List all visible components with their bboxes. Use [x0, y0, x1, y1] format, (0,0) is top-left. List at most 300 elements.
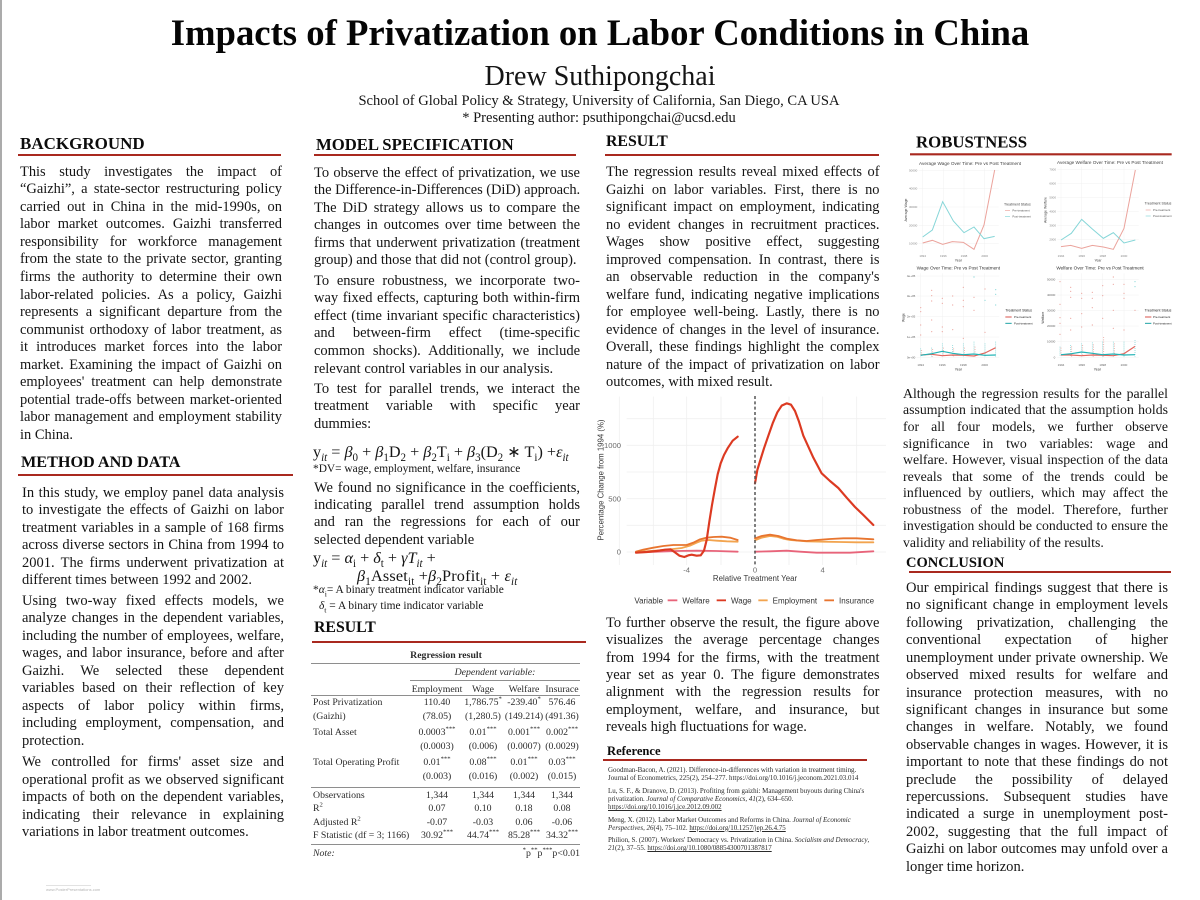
table row: adjusted r squared — [313, 815, 572, 828]
table row: post privatization: 110.40 — [424, 696, 450, 708]
table row: r squared: 0.07 — [428, 802, 446, 814]
formula: regression model — [313, 549, 518, 588]
reference: Meng: Perspectives, 26(4), 75–102. https://doi.org/10.1257/jep.26.4.75 — [608, 824, 786, 832]
y axis labels: 1000 — [604, 441, 621, 450]
text: model paragraph 4 — [314, 480, 580, 548]
text: robustness discussion: for all four models, we further observe — [903, 419, 1168, 434]
x axis labels — [683, 566, 826, 575]
table row: asset errors: (0.006) — [469, 740, 497, 752]
table row: asset errors — [420, 740, 579, 752]
chart legend: Variable — [634, 596, 664, 605]
table row: operating profit: 0.01*** — [510, 755, 538, 768]
plot: wage scatter over time: 2000 — [981, 363, 988, 367]
text: method paragraph 2: wages, and labor insurance, before and after — [22, 645, 284, 661]
table row: gaizhi errors: (Gaizhi) — [313, 710, 346, 722]
plot: average wage over time: 1996 — [940, 254, 947, 258]
text: method paragraph 1: 2001. The firms underwent privatization at — [22, 554, 284, 570]
text: robustness discussion: validity and reliability of the results. — [903, 535, 1104, 550]
table row: adjusted r squared: -0.03 — [473, 816, 493, 828]
text: model paragraph 1: firms that underwent privatization (treatment — [314, 235, 580, 251]
text: conclusion — [906, 580, 1168, 876]
heading: result: RESULT — [314, 618, 376, 636]
text: result summary: nature of the impact of privatization on labor — [606, 357, 880, 373]
text: model paragraph 1 — [314, 164, 580, 268]
text: method paragraph 1 — [22, 484, 284, 588]
text: conclusion: insurance protection measures, with no — [906, 685, 1168, 701]
plot: welfare scatter over time — [1041, 266, 1172, 372]
table row: adjusted r squared: -0.06 — [552, 816, 572, 828]
table row: operating profit: 0.08*** — [469, 755, 497, 768]
heading: result: RESULT — [606, 133, 668, 150]
reference: Lu and Dranove — [608, 786, 864, 811]
reference: Goodman-Bacon — [608, 766, 858, 782]
text: result summary — [606, 164, 880, 390]
line chart: percentage change from 1994 — [597, 396, 886, 605]
text: method paragraph 2: analyze changes in the dependent variables, — [22, 610, 284, 626]
text: conclusion: preclude the possibility of delayed — [906, 772, 1168, 788]
plot: average wage over time: Average Wage — [904, 198, 908, 221]
table row: gaizhi errors: (78.05) — [423, 710, 451, 722]
plot: average welfare over time: 1998 — [1099, 254, 1106, 258]
plot: average welfare over time: Treatment Status — [1145, 202, 1172, 206]
text: result summary: Wages show positive effect, suggesting — [606, 234, 880, 250]
text: model paragraph 1: group) and those that did not (control group). — [314, 252, 577, 268]
text: model paragraph 1: the Difference-in-Differences (DiD) approach. — [314, 182, 580, 198]
plot: average welfare over time: 2000 — [1049, 238, 1056, 242]
text: method paragraph 3 — [22, 754, 284, 840]
table row: total asset: Total Asset — [313, 726, 357, 738]
text: background: responsibility for workforce management — [20, 234, 282, 250]
text: figure explanation: from 1994 for the firms, with the treatment — [606, 650, 880, 666]
text: model paragraph 2: relevant control variables in our analysis. — [314, 361, 553, 377]
text: background: labor market outcomes. Gaizhi transferred — [20, 216, 282, 232]
reference: Meng: Meng, X. (2012). Labor Market Outcomes and Reforms in China. Journal of Economic — [608, 816, 851, 824]
plot: wage scatter over time: 1996 — [939, 363, 946, 367]
text: model paragraph 3 — [314, 381, 580, 432]
text: method paragraph 3: indicating their relevance in explaining — [22, 806, 284, 822]
text: figure explanation: To further observe the result, the figure above — [606, 615, 880, 631]
plot: average welfare over time: Post-treatment — [1153, 214, 1172, 218]
table note — [312, 846, 580, 858]
text: background: communist orthodoxy of labor treatment, as — [20, 322, 282, 338]
plot: welfare scatter over time: 1996 — [1078, 363, 1085, 367]
note: alpha and delta definitions: *αi= A binary treatment indicator variable — [313, 584, 504, 598]
x axis labels: 4 — [821, 566, 826, 575]
plot: welfare scatter over time: 40000 — [1047, 293, 1056, 297]
affiliation: School of Global Policy & Strategy, University of California, San Diego, CA USA — [358, 93, 840, 109]
chart legend — [634, 596, 875, 605]
table row: f statistic — [313, 828, 578, 840]
table note: Note: — [313, 848, 335, 858]
plot: average wage over time: 50000 — [909, 168, 918, 172]
panel: conclusion — [905, 552, 1173, 876]
plot: average welfare over time: Average Welfare — [1043, 197, 1047, 223]
plot: average wage over time: 10000 — [909, 242, 918, 246]
table row: gaizhi errors: (1,280.5) — [465, 710, 501, 722]
text: background: from the state to the private sector, granting — [20, 251, 282, 267]
plot: average welfare over time: 5000 — [1049, 196, 1056, 200]
text: method paragraph 2: including employment, compensation, and — [22, 715, 284, 731]
note: alpha and delta definitions — [313, 584, 504, 614]
text: background: it introduces market forces into the labor — [20, 339, 282, 355]
formula: regression model: yit = αi + δt + γTit + — [313, 549, 436, 570]
text: model paragraph 2 — [314, 273, 580, 377]
table row: r squared: 0.18 — [515, 802, 533, 814]
text: conclusion: Our empirical findings suggest that there is — [906, 580, 1168, 596]
chart legend: Wage — [731, 596, 752, 605]
text: result summary: for employee well-being. Lastly, there is no — [606, 304, 880, 320]
heading: robustness: ROBUSTNESS — [916, 132, 1027, 151]
title: Impacts of Privatization on Labor Conditions in China — [171, 12, 1029, 53]
text: robustness discussion: influenced by outliers, which may affect the — [903, 485, 1168, 500]
table row: operating profit: 0.01*** — [423, 755, 451, 768]
series: insurance — [636, 535, 873, 552]
table row: operating profit: 0.03*** — [548, 755, 576, 768]
text: method paragraph 3: impacts of both on the dependent variables, — [22, 789, 284, 805]
plot: wage scatter over time: 1994 — [917, 363, 924, 367]
text: model paragraph 3: To test for parallel trends, we interact the — [314, 381, 580, 397]
plot: welfare scatter over time: Post-treatment — [1153, 321, 1172, 325]
panel: method and data — [18, 452, 293, 840]
plot: wage scatter over time: Wage — [902, 313, 906, 322]
y axis labels: 500 — [608, 494, 621, 503]
text: figure explanation: employment, welfare, and insurance, but — [606, 702, 880, 718]
plot: average wage over time: Average Wage Over Time: Pre vs Post Treatment — [919, 161, 1022, 166]
y axis labels: 0 — [617, 548, 621, 557]
text: model paragraph 3: treatment variable with specific year — [314, 398, 580, 414]
series: employment — [636, 536, 873, 552]
text: conclusion: 2002, suggesting that the full impact of — [906, 824, 1168, 840]
table row: r squared: 0.08 — [553, 802, 571, 814]
formula: regression model: β1Assetit +β2Profitit + εit — [357, 567, 518, 588]
plot: average wage over time: 2000 — [981, 254, 988, 258]
text: robustness discussion: welfare. However, visual inspection of the data — [903, 452, 1168, 467]
text: model paragraph 4: selected dependent variable — [314, 532, 474, 548]
table column headers: Employment — [412, 684, 462, 694]
plot: average welfare over time: 6000 — [1049, 182, 1056, 186]
y axis title: Percentage Change from 1994 (%) — [597, 419, 606, 540]
plot: wage scatter over time: 3e+05 — [907, 294, 916, 298]
plot: welfare scatter over time: 1998 — [1099, 363, 1106, 367]
table row: profit errors: (0.003) — [423, 770, 451, 782]
x axis labels: 0 — [753, 566, 757, 575]
text: conclusion: longer time horizon. — [906, 859, 1024, 875]
plot: welfare scatter over time: Welfare — [1041, 312, 1045, 324]
table row: profit errors: (0.016) — [469, 770, 497, 782]
text: conclusion: Gaizhi on labor outcomes may unfold over a — [906, 841, 1168, 857]
text: background: “Gaizhi”, a state-sector restructuring policy — [20, 181, 282, 197]
text: robustness discussion: robustness of the model. Therefore, further — [903, 502, 1168, 517]
table row: operating profit: Total Operating Profit — [313, 756, 399, 768]
y axis labels — [604, 441, 621, 557]
plot: average welfare over time — [1043, 160, 1172, 263]
text: background: market. Examining the impact of Gaizhi on — [20, 357, 282, 373]
table column headers — [412, 684, 579, 694]
text: result summary: evidence of changes in the level of insurance. — [606, 322, 880, 338]
text: result summary: Overall, these findings highlight the complex — [606, 339, 880, 355]
text: method paragraph 1: different times between 1992 and 2002. — [22, 572, 252, 588]
reference: Goodman-Bacon: Goodman-Bacon, A. (2021). Difference-in-differences with variation in treatment timing. — [608, 766, 856, 774]
text: result summary: no evident changes in recruitment practices. — [606, 217, 880, 233]
text: conclusion: unemployment under private ownership. We — [906, 650, 1168, 666]
plot: average wage over time: 40000 — [909, 187, 918, 191]
reference: Philion: Philion, S. (2007). Workers' Democracy vs. Privatization in China. Socialism and Democracy, — [608, 836, 869, 844]
text: method paragraph 1: across diverse sectors in China from 1994 to — [22, 537, 284, 553]
text: result summary: outcomes, with mixed result. — [606, 374, 773, 390]
table row: f statistic: 34.32*** — [546, 828, 578, 840]
text: result summary: welfare fund, indicating negative implications — [606, 287, 880, 303]
table caption: Regression result — [410, 650, 482, 660]
plot: average wage over time: 30000 — [909, 205, 918, 209]
table row: observations: 1,344 — [472, 790, 494, 800]
panel: regression result — [311, 618, 586, 858]
text: model paragraph 1: The DiD strategy allows us to compare the — [314, 200, 580, 216]
table row: observations: 1,344 — [551, 790, 573, 800]
plot: average wage over time: 20000 — [909, 223, 918, 227]
table row: total asset: 0.001*** — [508, 725, 540, 738]
text: figure explanation: reveals high fluctuations for wage. — [606, 719, 807, 735]
text: method paragraph 3: variations in labor treatment outcomes. — [22, 824, 249, 840]
table column headers: Insurace — [545, 684, 579, 694]
table row: gaizhi errors — [313, 710, 579, 722]
text: method paragraph 2: variables based on their reflection of key — [22, 680, 284, 696]
plot: average welfare over time: Average Welfare Over Time: Pre vs Post Treatment — [1057, 160, 1164, 165]
heading: conclusion: CONCLUSION — [906, 554, 1004, 570]
table row: total asset: 0.01*** — [469, 725, 497, 738]
presenting author email: * Presenting author: psuthipongchai@ucsd.edu — [462, 110, 736, 126]
plot: average welfare over time: 3000 — [1049, 224, 1056, 228]
reference: Goodman-Bacon: Journal of Econometrics, 225(2), 254–277. https://doi.org/10.1016/j.jeconom.2021.03.014 — [608, 774, 858, 782]
text: figure explanation — [606, 615, 880, 735]
table row: post privatization: 1,786.75* — [464, 695, 502, 708]
text: method paragraph 1: to investigate the effects of Gaizhi on labor — [22, 502, 284, 518]
text: conclusion: indicated a surge in unemployment post- — [906, 806, 1168, 822]
text: result summary: significant impact on employment, indicating — [606, 199, 880, 215]
text: result summary: improved compensation. In contrast, there is — [606, 252, 880, 268]
table row: adjusted r squared: Adjusted R2 — [313, 815, 361, 828]
heading: model specification: MODEL SPECIFICATION — [316, 134, 514, 154]
text: robustness discussion: significance in two variables: wage and — [903, 436, 1168, 451]
table row: gaizhi errors: (491.36) — [545, 710, 579, 722]
plot: welfare scatter over time: 30000 — [1047, 308, 1056, 312]
plot: welfare scatter over time: Treatment Status — [1145, 308, 1172, 312]
text: figure explanation: year set as year 0. The figure demonstrates — [606, 667, 880, 683]
plot: average welfare over time: Year — [1094, 259, 1102, 263]
text: background: potential trade-offs between market-oriented — [20, 392, 282, 408]
table row: total asset — [313, 725, 578, 738]
text: method paragraph 2 — [22, 592, 284, 748]
text: method paragraph 2: Gaizhi. We selected these dependent — [22, 662, 284, 678]
plot: welfare scatter over time: 2000 — [1121, 363, 1128, 367]
reference: Lu and Dranove: privatization. Journal of Comparative Economics, 41(2), 634–650. — [608, 795, 793, 803]
series: wage — [636, 403, 873, 557]
heading: method and data: METHOD AND DATA — [21, 452, 180, 470]
plot: average wage over time: Post-treatment — [1012, 214, 1031, 218]
plot: average wage over time: 1998 — [961, 254, 968, 258]
plot: welfare scatter over time: 1994 — [1058, 363, 1065, 367]
text: model paragraph 4: We found no significance in the coefficients, — [314, 480, 580, 496]
table row: total asset: 0.002*** — [546, 725, 578, 738]
text: conclusion: observed mixed results for welfare and — [906, 667, 1168, 683]
x axis title: Relative Treatment Year — [713, 574, 797, 583]
author name: Drew Suthipongchai — [485, 61, 715, 92]
text: background: represents a significant departure from the — [20, 304, 282, 320]
text: background: labor management and employment stability — [20, 409, 282, 425]
text: conclusion: conventional expectation of higher — [906, 632, 1168, 648]
plot: average welfare over time: 7000 — [1049, 168, 1056, 172]
plot: average wage over time: Pre-treatment — [1012, 209, 1030, 213]
plot: wage scatter over time: 2e+05 — [907, 315, 916, 319]
heading: background: BACKGROUND — [20, 134, 145, 152]
table row: r squared: 0.10 — [474, 802, 492, 814]
table row: operating profit — [313, 755, 576, 768]
text: method paragraph 2: Using two-way fixed effects models, we — [22, 592, 284, 608]
plot: wage scatter over time: Year — [955, 368, 963, 372]
text: robustness discussion: Although the regression results for the parallel — [903, 386, 1168, 401]
text: background — [20, 164, 282, 443]
plot: welfare scatter over time: 10000 — [1047, 340, 1056, 344]
chart legend: Insurance — [839, 596, 875, 605]
table row: asset errors: (0.0003) — [420, 740, 454, 752]
text: robustness discussion: investigation should be conducted to ensure the — [903, 518, 1168, 533]
page frame edge — [0, 0, 2, 900]
panel: robustness charts — [902, 132, 1172, 372]
plot: average welfare over time: 1996 — [1078, 254, 1085, 258]
table row: total asset: 0.0003*** — [419, 725, 455, 738]
plot: welfare scatter over time: 0 — [1054, 355, 1056, 359]
text: robustness discussion: assumption indicated that the assumption holds — [903, 402, 1168, 417]
reference: Philion: 21(2), 37–55. https://doi.org/10.1080/08854300701387817 — [608, 844, 772, 852]
table row: f statistic: F Statistic (df = 3; 1166) — [313, 830, 409, 840]
text: model paragraph 1: To observe the effect of privatization, we use — [314, 164, 580, 180]
text: conclusion: repercussions. Subsequent studies have — [906, 789, 1168, 805]
panel: background — [18, 134, 282, 443]
plot: welfare scatter over time: Pre-treatment — [1153, 315, 1171, 319]
table row: adjusted r squared: -0.07 — [427, 816, 447, 828]
text: background: in China. — [20, 427, 73, 443]
text: robustness discussion — [903, 386, 1168, 550]
text: method paragraph 3: We controlled for firms' asset size and — [22, 754, 284, 770]
plot: wage scatter over time: Pre-treatment — [1014, 315, 1032, 319]
plot: wage scatter over time: 0e+00 — [907, 355, 916, 359]
table row: observations — [313, 790, 573, 800]
table row: profit errors — [423, 770, 576, 782]
plot: average wage over time: Year — [955, 259, 963, 263]
text: model paragraph 2: To ensure robustness, we incorporate two- — [314, 273, 580, 289]
text: conclusion: changes in welfare. Notably, we found — [906, 719, 1168, 735]
table row: asset errors: (0.0007) — [507, 740, 541, 752]
table row: observations: Observations — [313, 790, 365, 800]
plot: average welfare over time: 2000 — [1121, 254, 1128, 258]
table row: r squared: R2 — [313, 801, 323, 814]
note: alpha and delta definitions: δt = A binary time indicator variable — [319, 600, 483, 614]
text: robustness discussion: reveals that some of the trends could be — [903, 469, 1168, 484]
plot: average welfare over time: 4000 — [1049, 210, 1056, 214]
panel: references — [603, 744, 869, 852]
series: welfare — [636, 551, 873, 553]
table row: f statistic: 85.28*** — [508, 828, 540, 840]
table column headers: Welfare — [509, 684, 539, 694]
text: method paragraph 1: In this study, we employ panel data analysis — [22, 484, 284, 500]
treatment year marker — [753, 396, 757, 566]
text: model paragraph 2: common shocks). Additionally, we include — [314, 343, 580, 359]
chart legend: Employment — [773, 596, 818, 605]
text: conclusion: no significant change in employment levels — [906, 597, 1168, 613]
plot: average wage over time: 1994 — [919, 254, 926, 258]
text: background: firms the authority to determine their own — [20, 269, 282, 285]
plot: wage scatter over time: 1e+05 — [907, 335, 916, 339]
panel: model specification — [313, 134, 580, 614]
table row: post privatization: -239.40* — [507, 695, 541, 708]
text: method paragraph 2: aspects of labor policy within firms, — [22, 698, 284, 714]
footer: poster template credit: www.PosterPresentations.com — [46, 887, 100, 892]
text: conclusion: observable changes in wages. However, it is — [906, 737, 1168, 753]
plot: welfare scatter over time: 50000 — [1047, 277, 1056, 281]
text: conclusion: important to note that these findings do not — [906, 754, 1168, 770]
plot: wage scatter over time: 4e+05 — [907, 274, 916, 278]
text: figure explanation: alignment with the regression results for — [606, 684, 880, 700]
text: model paragraph 2: way fixed effects, capturing both within-firm — [314, 290, 580, 306]
table row: observations: 1,344 — [513, 790, 535, 800]
table row: adjusted r squared: 0.06 — [515, 816, 533, 828]
text: method paragraph 2: including the number of employees, welfare, — [22, 628, 284, 644]
table row: f statistic: 44.74*** — [467, 828, 499, 840]
text: method paragraph 3: operational profit as we observed significant — [22, 772, 284, 788]
table row: f statistic: 30.92*** — [421, 828, 453, 840]
text: method paragraph 1: treatment variables in a sample of 168 firms — [22, 520, 284, 536]
table row: asset errors: (0.0029) — [545, 740, 579, 752]
plot: average wage over time: Treatment Status — [1004, 202, 1031, 206]
plot: wage scatter over time: Treatment Status — [1005, 308, 1032, 312]
text: model paragraph 4: indicating parallel trend assumption holds — [314, 497, 580, 513]
text: conclusion: significant changes in insurance but some — [906, 702, 1168, 718]
plot: average welfare over time: Pre-treatment — [1153, 208, 1171, 212]
plot: welfare scatter over time: Welfare Over Time: Pre vs Post Treatment — [1056, 266, 1144, 271]
note: dependent variables: *DV= wage, employment, welfare, insurance — [313, 463, 520, 475]
table row: profit errors: (0.015) — [548, 770, 576, 782]
text: result summary: The regression results reveal mixed effects of — [606, 164, 880, 180]
table row: post privatization: Post Privatization — [313, 696, 382, 708]
text: figure explanation: visualizes the average percentage changes — [606, 632, 880, 648]
header: title and authors — [171, 12, 1029, 126]
text: conclusion: following privatization, challenging the — [906, 615, 1168, 631]
plot: welfare scatter over time: Year — [1094, 368, 1102, 372]
text: background: employees' treatment can help demonstrate — [20, 374, 282, 390]
reference: Lu and Dranove: Lu, S. F., & Dranove, D. (2013). Profiting from gaizhi: Management buyouts during China's — [608, 786, 864, 794]
text: model paragraph 3: dummies: — [314, 416, 371, 432]
plot: average wage over time — [904, 161, 1031, 263]
text: method paragraph 2: protection. — [22, 732, 84, 748]
text: background: This study investigates the impact of — [20, 164, 282, 180]
table dependent variable header: Dependent variable: — [455, 666, 535, 678]
text: model paragraph 1: changes in outcomes over time between the — [314, 217, 580, 233]
table row: r squared — [313, 801, 571, 814]
reference: Lu and Dranove: https://doi.org/10.1016/j.jce.2012.09.002 — [608, 803, 722, 811]
text: model paragraph 2: effect (time invariant specific characteristics) — [314, 308, 580, 324]
plot: welfare scatter over time: 20000 — [1047, 324, 1056, 328]
table row: profit errors: (0.002) — [510, 770, 538, 782]
text: result summary: Gaizhi on labor variables. First, there is no — [606, 182, 880, 198]
text: background: carried out in China in the mid-1990s, on — [20, 199, 282, 215]
table row: post privatization — [313, 695, 576, 708]
reference: Meng — [608, 816, 851, 832]
plot: average welfare over time: 1994 — [1058, 254, 1065, 258]
text: background: labor-related policies. As a policy, Gaizhi — [20, 287, 282, 303]
table note: *p**p***p<0.01 — [523, 846, 580, 858]
text: result summary: an observable reduction in the company's — [606, 269, 880, 285]
text: model paragraph 4: and ran the regressions for each of our — [314, 514, 580, 530]
table row: post privatization: 576.46 — [549, 696, 575, 708]
